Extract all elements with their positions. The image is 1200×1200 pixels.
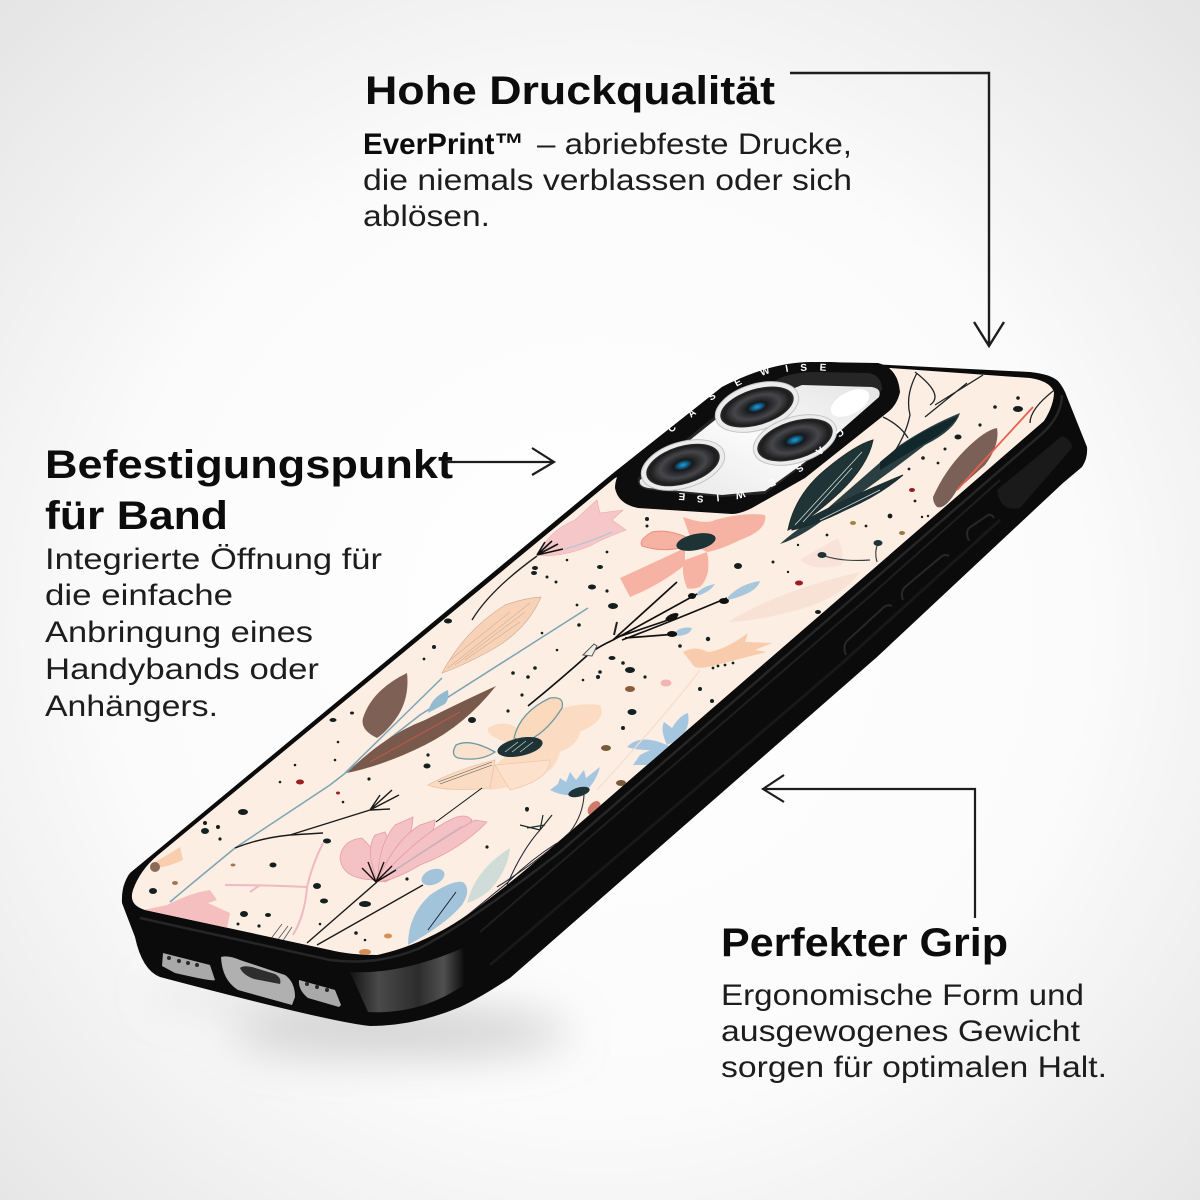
lens left	[635, 430, 731, 500]
pink branch	[225, 843, 323, 935]
flower centre	[676, 533, 716, 551]
lens right	[747, 405, 843, 475]
brand text bottom: CASEWISE	[678, 426, 846, 504]
heading: Befestigungspunkt	[45, 443, 453, 487]
arrow: to camera	[445, 448, 554, 475]
dots	[149, 396, 1023, 941]
flash	[826, 383, 874, 423]
body text: die einfache	[45, 579, 233, 612]
body text: ausgewogenes Gewicht	[721, 1015, 1081, 1048]
peach flower	[428, 698, 602, 790]
body text: die niemals verblassen oder sich	[363, 164, 852, 197]
lower corner highlight	[350, 948, 464, 1012]
bottom left speaker	[162, 953, 215, 980]
small white sprig	[272, 924, 292, 940]
side edge	[480, 480, 1000, 932]
charging port	[221, 956, 295, 1005]
side mute switch	[997, 436, 1072, 509]
callout: print quality	[363, 69, 852, 233]
blue flower	[627, 713, 689, 765]
dark leaves top right	[780, 372, 983, 544]
rim highlight	[140, 395, 1062, 962]
peach tulip	[683, 633, 772, 668]
body text: – abriebfeste Drucke,	[537, 128, 852, 161]
stems lower	[235, 790, 423, 945]
ring inner bevel	[638, 372, 882, 497]
lens top	[709, 372, 805, 442]
heading	[45, 443, 453, 538]
body text	[363, 128, 852, 233]
small blue flower	[497, 767, 600, 887]
salmon flower	[620, 514, 765, 597]
heading: Perfekter Grip	[721, 921, 1008, 965]
heading: Hohe Druckqualität	[365, 69, 775, 113]
small blue leaf	[428, 690, 448, 713]
big pink flower	[340, 788, 487, 882]
brand text top: CASEWISE	[666, 363, 827, 435]
body text: sorgen für optimalen Halt.	[721, 1051, 1107, 1084]
brown leaf small	[363, 673, 408, 738]
blue leaves	[422, 868, 444, 886]
pale peach smear	[728, 572, 860, 622]
body text: ablösen.	[363, 200, 490, 233]
bottom left pink flower	[143, 890, 230, 928]
body text: Ergonomische Form und	[721, 979, 1084, 1012]
callout: strap attachment	[45, 443, 453, 723]
body text: EverPrint™	[363, 128, 524, 161]
peach bud corner	[153, 847, 183, 868]
body text: Handybands oder	[45, 653, 319, 686]
side buttons	[844, 515, 994, 655]
body text: Anbringung eines	[45, 616, 313, 649]
camera window	[640, 385, 880, 495]
phone case with floral print	[100, 340, 1100, 1026]
beige leaf	[442, 597, 541, 673]
arrow: to phone side	[763, 775, 975, 918]
body text: Integrierte Öffnung für	[45, 543, 382, 576]
camera ring	[615, 362, 900, 514]
sprig	[520, 815, 552, 830]
callout: grip	[721, 921, 1107, 1084]
camera module	[615, 362, 900, 514]
body text: Anhängers.	[45, 690, 218, 723]
arrow: to phone top edge	[790, 73, 1004, 346]
case body	[122, 362, 1087, 1026]
body text	[721, 979, 1107, 1084]
body text	[45, 543, 382, 723]
blue stems	[170, 608, 588, 902]
blue buds and stems	[528, 581, 760, 706]
bottom right speaker	[299, 980, 341, 1007]
tulip top	[472, 500, 626, 620]
red line	[957, 407, 1033, 490]
brown long leaf	[347, 686, 496, 773]
phone shadow	[150, 981, 570, 1058]
flower centre	[497, 737, 543, 757]
heading: für Band	[45, 494, 228, 538]
printed face	[132, 368, 1054, 955]
red flower bud	[588, 801, 600, 815]
coloured dots	[172, 488, 915, 955]
brown feather leaf right	[933, 428, 998, 507]
